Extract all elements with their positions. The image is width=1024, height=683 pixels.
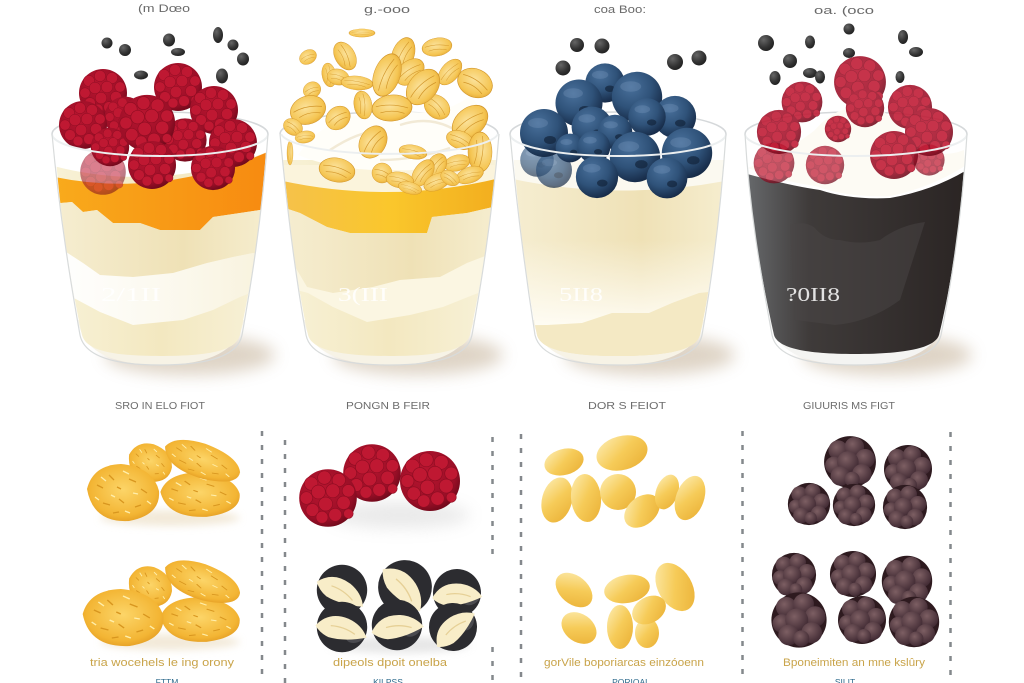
glass outline [52, 134, 268, 365]
parfait layers [514, 160, 724, 356]
icon: raspberries [299, 444, 470, 528]
parfait layers [283, 160, 496, 356]
seeds [556, 38, 706, 76]
glass base [770, 320, 943, 365]
fruit: raspberries [754, 56, 953, 184]
panel: raspberry mango parfait [50, 27, 275, 375]
heading: ingredient columns: DOR S FEIOT [588, 400, 667, 412]
heading: cup titles: coa Boo: [594, 4, 646, 16]
panel: almond ingredient column [537, 430, 711, 683]
cup label: 5II8 [559, 284, 603, 306]
glass shadow [105, 335, 275, 375]
column dividers [262, 431, 950, 683]
glass base [533, 320, 704, 365]
panel: flake ingredient column [83, 432, 245, 683]
panel: blueberry parfait [508, 38, 735, 375]
glass base [78, 320, 244, 365]
fruit: raspberries [59, 63, 257, 195]
heading: ingredient columns [115, 400, 896, 412]
icon: chocolate dipped nuts [311, 553, 490, 660]
glass outline [510, 134, 726, 365]
heading: ingredient columns: PONGN B FEIR [346, 400, 430, 412]
glass back rim [510, 112, 726, 134]
glass back rim [280, 112, 498, 134]
whipped cream [748, 106, 965, 196]
icon: almonds bottom [549, 556, 703, 650]
cup label: 3(III [338, 284, 388, 306]
seeds [758, 24, 923, 85]
glass shadow [333, 335, 503, 375]
heading: cup titles [138, 3, 874, 17]
glass base [304, 320, 474, 365]
caption: dipeols dpoit onelba [333, 657, 448, 669]
fruit: blueberries [520, 63, 712, 198]
panel: chocolate cluster column [771, 436, 939, 683]
glass back rim [745, 112, 967, 134]
glass outline [280, 134, 499, 365]
glass back rim [52, 112, 268, 134]
heading: cup titles: oa. (oco [814, 5, 874, 17]
whipped cream [298, 96, 479, 170]
caption: Bponeimiten an mne kslûry [783, 657, 926, 669]
icon: almonds top [537, 430, 711, 535]
panel: raspberry ingredient column [299, 444, 490, 683]
parfait layers [748, 172, 964, 354]
fruit: oat flakes [280, 29, 497, 197]
seeds [102, 27, 249, 84]
parfait layers [56, 152, 266, 356]
glass shadow [565, 335, 735, 375]
panel: dark raspberry parfait [740, 24, 972, 375]
caption: tria wocehels le ing orony [90, 657, 235, 669]
cup label: ?0II8 [786, 284, 840, 306]
heading: cup titles: g.-ooo [364, 4, 410, 16]
glass outline [745, 134, 967, 365]
caption: gorVile boporiarcas einzóoenn [544, 657, 704, 669]
glass shadow [802, 335, 972, 375]
heading: ingredient columns: SRO IN ELO FIOT [115, 400, 206, 412]
cup label: 2/1II [101, 284, 161, 306]
icon: cereal flakes top [87, 432, 245, 526]
icon: clusters top [788, 436, 932, 529]
icon: cereal flakes bottom [83, 553, 245, 650]
heading: ingredient columns: GIUURIS MS FIGT [803, 400, 896, 412]
panel: oat parfait [278, 29, 503, 375]
icon: clusters bottom [771, 551, 939, 648]
heading: cup titles: (m Dœo [138, 3, 190, 15]
